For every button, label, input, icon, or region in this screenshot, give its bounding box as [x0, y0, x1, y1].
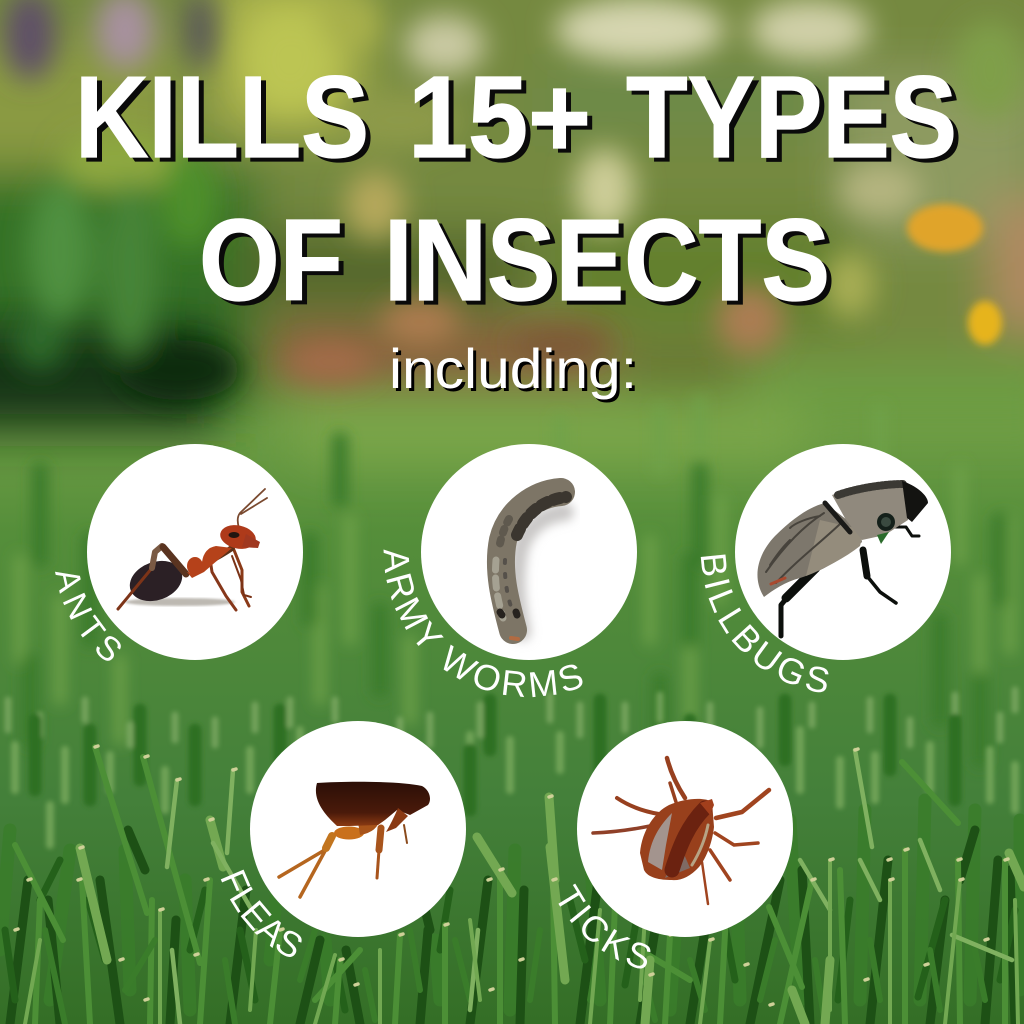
- icon: caterpillar: [495, 492, 566, 639]
- label: ticks: TICKS: [558, 884, 650, 968]
- panel: army worms: [384, 444, 637, 698]
- icon: ant: [118, 489, 267, 610]
- title: 15+: [413, 56, 596, 186]
- title: 15+: [408, 52, 591, 182]
- panel: billbugs: [700, 444, 951, 692]
- icon: tick: [593, 758, 769, 904]
- dark blades: [10, 830, 1015, 1024]
- icon: billbug beetle: [757, 481, 928, 636]
- title: INSECTS: [384, 195, 830, 325]
- subtitle: including: including:: [389, 337, 637, 400]
- title: TYPES: [626, 52, 957, 182]
- wide backdrop blades: [0, 800, 1020, 1010]
- mid lawn: soft streaks: [20, 400, 1010, 760]
- title: OF: [204, 199, 348, 329]
- panel: ants: [55, 444, 303, 661]
- near lawn: out of focus grass tips: [8, 690, 1015, 845]
- title: TYPES: [631, 56, 962, 186]
- grass tips: [15, 746, 1008, 1005]
- subtitle: including: including:: [392, 340, 640, 403]
- label: billbugs: BILLBUGS: [700, 554, 828, 692]
- title: KILLS: [75, 52, 369, 182]
- title: [75, 52, 962, 329]
- mid blades: [15, 747, 1005, 1024]
- title: INSECTS: [389, 199, 835, 329]
- title: OF: [199, 195, 343, 325]
- panel: fleas: [220, 721, 466, 957]
- label: ants: ANTS: [55, 572, 121, 661]
- title: KILLS: [80, 56, 374, 186]
- icon: flea: [279, 782, 430, 897]
- bright blades: [80, 797, 1024, 1024]
- label: army worms: ARMY WORMS: [384, 550, 582, 698]
- panel: ticks: [558, 721, 793, 968]
- label: fleas: FLEAS: [220, 870, 302, 957]
